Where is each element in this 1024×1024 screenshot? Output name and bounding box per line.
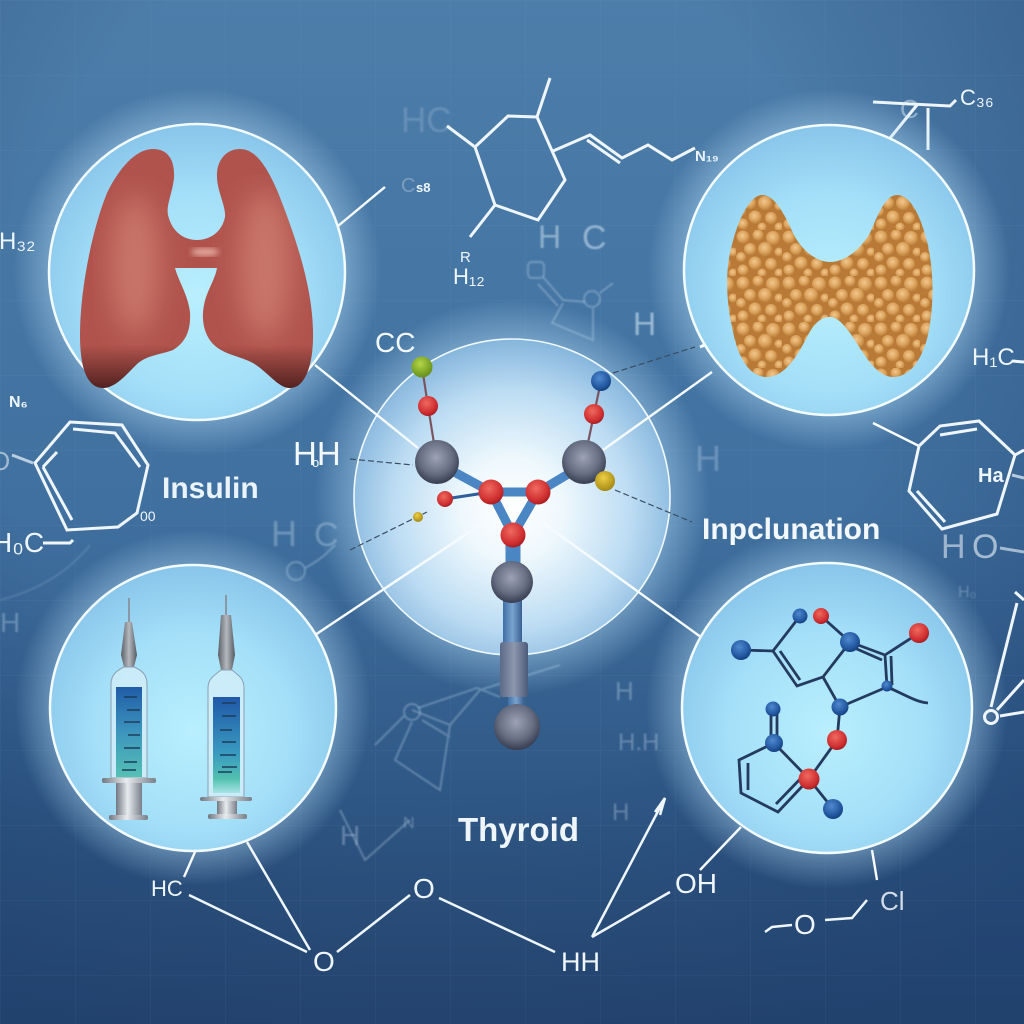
top right formula xyxy=(873,85,994,150)
label: HoH: o xyxy=(312,455,319,470)
bottom labels: OH xyxy=(675,868,717,899)
right hexagon molecule xyxy=(909,361,1024,552)
bottom labels: O xyxy=(413,873,435,904)
molecule atoms xyxy=(412,356,615,750)
top right formula: C xyxy=(900,94,919,124)
faint background labels: N xyxy=(403,815,415,832)
top right formula: C₃₆ xyxy=(960,85,994,110)
bottom labels: O xyxy=(794,909,816,940)
label: HoH: HH xyxy=(293,435,341,472)
label: CC: CC xyxy=(375,327,415,358)
label: Thyroid: Thyroid xyxy=(458,811,579,848)
faint background labels: H xyxy=(538,219,561,255)
icon: syringe right xyxy=(200,595,252,819)
right side labels: H xyxy=(941,528,966,566)
top molecule diagram xyxy=(447,78,695,237)
bottom molecule chain xyxy=(189,798,867,952)
top molecule labels: H₁₂ xyxy=(453,264,485,289)
bottom labels: HC xyxy=(151,876,183,901)
faint background labels: H xyxy=(612,799,629,826)
left side labels: N₆ xyxy=(9,394,28,411)
right side labels xyxy=(941,344,1015,566)
top molecule labels xyxy=(453,148,719,289)
connector lines to centre xyxy=(184,187,919,880)
faint background labels xyxy=(0,101,976,851)
bottom labels: O xyxy=(313,946,335,977)
right triangle xyxy=(984,592,1024,724)
leader lines xyxy=(350,347,695,550)
right side labels: H₁C xyxy=(972,344,1015,371)
panel: lung organ xyxy=(49,124,345,420)
left hexagon molecule xyxy=(12,422,148,543)
icon: syringe left xyxy=(102,598,156,820)
faint background labels: H xyxy=(0,607,20,638)
left side labels xyxy=(0,175,430,558)
right side labels: O xyxy=(972,528,998,566)
faint background labels: H.H xyxy=(618,729,659,756)
icon: thyroid xyxy=(727,195,932,377)
bottom labels: HH xyxy=(561,947,600,977)
panel: syringes xyxy=(50,565,336,851)
left side labels: H₃₂ xyxy=(0,228,35,255)
faint background labels: H xyxy=(271,513,297,554)
bottom labels: Cl xyxy=(880,886,905,916)
panel: thyroid organ xyxy=(684,125,974,415)
faint background labels: H₀ xyxy=(958,584,976,601)
left side labels: 00 xyxy=(140,508,156,524)
top molecule labels: R xyxy=(460,249,471,266)
faint background labels: C xyxy=(314,516,339,554)
left side labels: s8 xyxy=(416,180,430,195)
centre molecule xyxy=(350,347,695,750)
faint background labels: C xyxy=(582,219,607,257)
faint background labels: H xyxy=(633,306,656,342)
faint background labels: H xyxy=(615,676,634,706)
faint background labels: HC xyxy=(401,101,452,140)
faint background labels: H xyxy=(340,820,360,851)
bottom labels xyxy=(151,868,905,977)
icon: lungs xyxy=(80,149,314,388)
top molecule labels: N₁₉ xyxy=(695,148,719,165)
panel: centre disc xyxy=(354,339,670,655)
icon: molecule structure xyxy=(731,608,929,819)
left side labels: C xyxy=(401,175,415,197)
panel glows xyxy=(13,88,1010,889)
faint background labels: H xyxy=(695,438,721,479)
faint background chemical structures xyxy=(0,262,613,860)
label: Insulin: Insulin xyxy=(162,472,259,505)
molecule bonds xyxy=(422,367,601,709)
label: Inpclunation: Inpclunation xyxy=(702,513,880,546)
panel: molecule disc xyxy=(682,563,972,853)
right side labels: Ha xyxy=(978,465,1004,487)
